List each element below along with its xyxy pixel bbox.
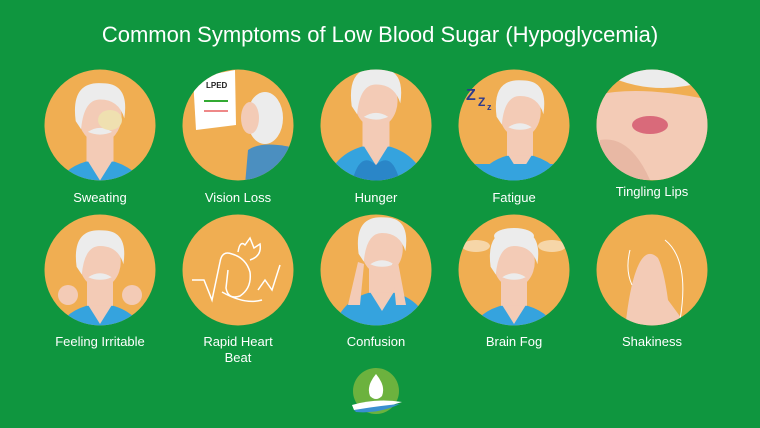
panel: tingling lips — [596, 60, 710, 199]
panel: confusion: Confusion — [347, 334, 405, 349]
panel: fatigue: Z — [466, 87, 476, 104]
title: Common Symptoms of Low Blood Sugar (Hypoglycemia) — [102, 22, 658, 47]
panel: feeling irritable — [44, 214, 156, 363]
panel: fatigue: Fatigue — [492, 190, 536, 205]
panel: confusion — [320, 214, 434, 350]
panel: hunger: Hunger — [355, 190, 398, 205]
logo — [352, 368, 402, 414]
panel: vision loss: LPED — [206, 81, 228, 90]
panel: fatigue — [458, 70, 572, 213]
panel: sweating: Sweating — [73, 190, 127, 205]
panel: sweating — [44, 70, 156, 204]
panel: rapid heart beat: Beat — [225, 350, 252, 365]
panel: shakiness: Shakiness — [622, 334, 682, 349]
panel: vision loss: Vision Loss — [205, 190, 272, 205]
panel: feeling irritable: Feeling Irritable — [55, 334, 145, 349]
panel: fatigue: z — [487, 102, 492, 112]
panel: rapid heart beat — [182, 214, 294, 365]
panel: tingling lips: Tingling Lips — [616, 184, 689, 199]
panel: rapid heart beat: Rapid Heart — [203, 334, 273, 349]
panel: vision loss — [182, 70, 300, 205]
panel: brain fog: Brain Fog — [486, 334, 542, 349]
panel: shakiness — [596, 214, 708, 349]
panel: brain fog — [458, 214, 570, 363]
panel: hunger — [320, 68, 432, 206]
panel: fatigue: Z — [478, 95, 485, 109]
